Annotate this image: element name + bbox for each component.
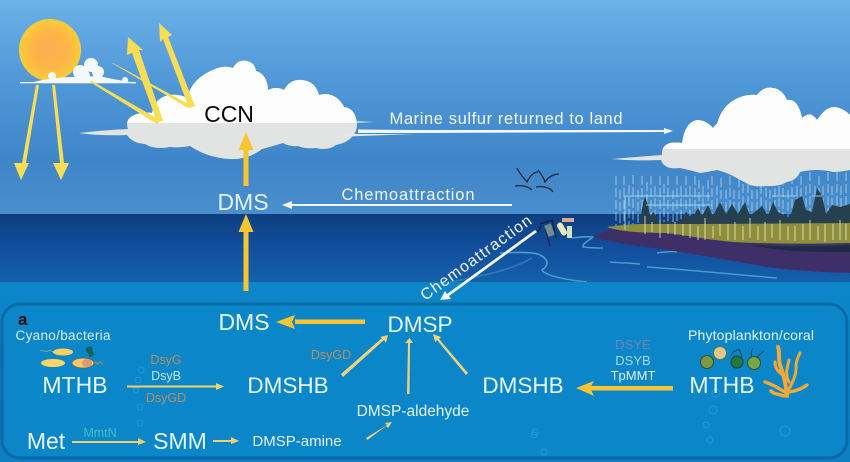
land mass: [593, 220, 850, 273]
enzymes: right: DSYE: [615, 337, 651, 352]
organism in sea: [538, 218, 574, 246]
arrow: DMS surface link: [238, 214, 254, 291]
label: MTHB right: MTHB: [689, 372, 755, 398]
enzyme: DsyGD center: DsyGD: [311, 348, 351, 362]
arrow: Met to SMM: [72, 438, 146, 445]
down arrows: [14, 85, 39, 180]
sun: [19, 19, 136, 83]
arrow: chemoattraction to DMS: Chemoattraction: [342, 186, 474, 204]
arrow: MTHB to DMSHB: [127, 383, 224, 390]
icon: phytoplankton: [700, 346, 764, 370]
arrow: chemoattraction diagonal: Chemoattraction: [418, 212, 535, 304]
label: DMSP: DMSP: [387, 312, 453, 337]
heading: Phytoplankton/coral: Phytoplankton/coral: [688, 327, 814, 343]
arrow: aldehyde to DMSP: [405, 338, 413, 394]
arrow: marine sulfur to land: Marine sulfur returned to land: [390, 110, 622, 128]
label a: a: [18, 310, 28, 329]
arrow: DMS to CCN: [238, 132, 254, 186]
arrow: DMSHB right to DMSP: [433, 334, 468, 375]
bubbles: [134, 367, 790, 455]
cloud: CCN: [79, 61, 415, 159]
arrow: SMM to amine: [213, 437, 239, 444]
enzymes: left: DsyG: [150, 353, 182, 367]
arrow: amine to aldehyde: [366, 422, 392, 440]
enzymes: right: [611, 337, 655, 383]
panel a frame: [2, 304, 847, 458]
label: DMSHB right: DMSHB: [482, 373, 564, 398]
label: CCN: CCN: [204, 101, 254, 127]
incoming beams: [90, 81, 160, 124]
arrow: marine sulfur to land: [358, 110, 673, 134]
small cloud by sun: [20, 58, 136, 83]
sea band: [0, 214, 850, 283]
arrow: MTHB to DMSHB right: [576, 381, 673, 396]
icon: coral: [765, 347, 807, 396]
reflected arrows: [127, 37, 163, 122]
arrow: chemoattraction to DMS: [282, 186, 512, 209]
label: DMS atmosphere: DMS: [217, 189, 269, 215]
rain highlights: [625, 196, 822, 230]
cloud tail: [340, 134, 415, 137]
enzymes: left: [146, 353, 186, 405]
rain: [616, 172, 846, 245]
right cloud and land: [593, 88, 850, 273]
enzymes: left: DsyB: [151, 369, 181, 383]
label: DMSHB left: DMSHB: [247, 373, 329, 398]
sunlight arrows: [14, 23, 195, 180]
enzymes: right: TpMMT: [611, 368, 655, 383]
enzymes: right: DSYB: [615, 353, 651, 368]
icon: bacteria: [40, 346, 103, 368]
label: DMS panel: DMS: [218, 309, 270, 335]
enzyme: MmtN: MmtN: [83, 426, 117, 440]
arrow: DMSP to DMS: [276, 315, 365, 329]
label: MTHB left: MTHB: [42, 372, 108, 398]
sky background: [0, 0, 850, 215]
label: DMSP-amine: DMSP-amine: [252, 433, 342, 450]
label: SMM: SMM: [153, 428, 207, 454]
Cyano/bacteria heading: Cyano/bacteria: [16, 328, 111, 343]
birds: [515, 168, 559, 192]
tree line: [640, 188, 850, 224]
water band: [0, 282, 850, 462]
label: Met: Met: [27, 428, 66, 454]
arrow: DMSHB to DMSP left: [341, 335, 388, 377]
label: DMSP-aldehyde: DMSP-aldehyde: [357, 403, 469, 420]
enzymes: left: DsyGD: [146, 391, 186, 405]
